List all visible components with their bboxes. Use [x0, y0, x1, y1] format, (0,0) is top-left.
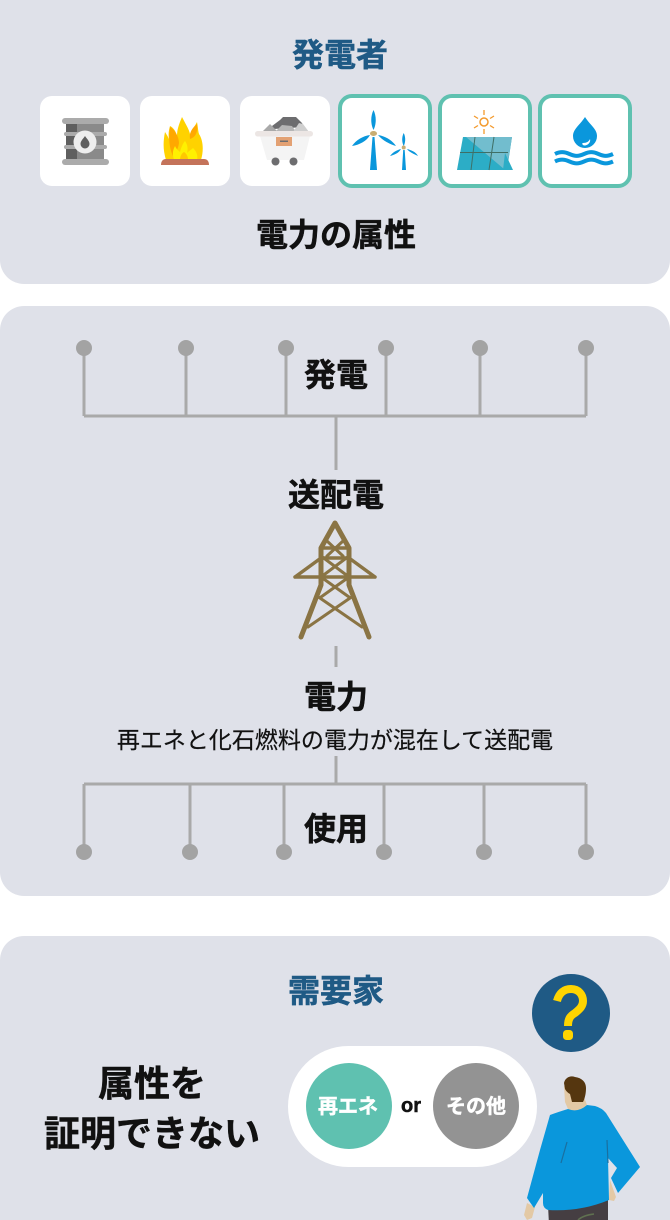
panel: consumer: [0, 936, 670, 1220]
label: usage: 使用: [304, 811, 368, 847]
icon: transmission tower: [295, 523, 375, 637]
panel: grid: [0, 306, 670, 896]
option: other: [433, 1063, 519, 1149]
connector: [334, 646, 338, 667]
text: cannot prove attributes: 証明できない: [44, 1113, 260, 1154]
label: generation: 発電: [304, 357, 368, 393]
label: electricity: 電力: [304, 679, 368, 715]
diagram: generation lines: [76, 340, 594, 470]
text: mixed power note: 再エネと化石燃料の電力が混在して送配電: [117, 727, 553, 753]
option: renewable: [306, 1063, 392, 1149]
icon: flame: [140, 96, 230, 186]
panel: generators: [0, 0, 670, 284]
heading: consumer: 需要家: [288, 973, 384, 1009]
text: cannot prove attributes: [44, 1063, 260, 1154]
text: or: or: [401, 1095, 421, 1117]
text: cannot prove attributes: 属性を: [98, 1063, 206, 1104]
illustration: person from behind: [524, 1076, 640, 1220]
option: other: その他: [446, 1095, 506, 1118]
icon: hydro water: [540, 96, 630, 186]
heading: generators: 発電者: [292, 37, 388, 73]
icon: question bubble: [532, 974, 610, 1052]
icon: wind turbines: [340, 96, 430, 186]
icon: oil barrel: [40, 96, 130, 186]
heading: power attributes: 電力の属性: [256, 217, 416, 253]
option: renewable: 再エネ: [318, 1095, 378, 1118]
icon: solar panel: [440, 96, 530, 186]
icon: coal cart: [240, 96, 330, 186]
pill: options: [288, 1046, 537, 1167]
label: transmission: 送配電: [288, 477, 384, 513]
diagram: usage lines: [76, 756, 594, 860]
